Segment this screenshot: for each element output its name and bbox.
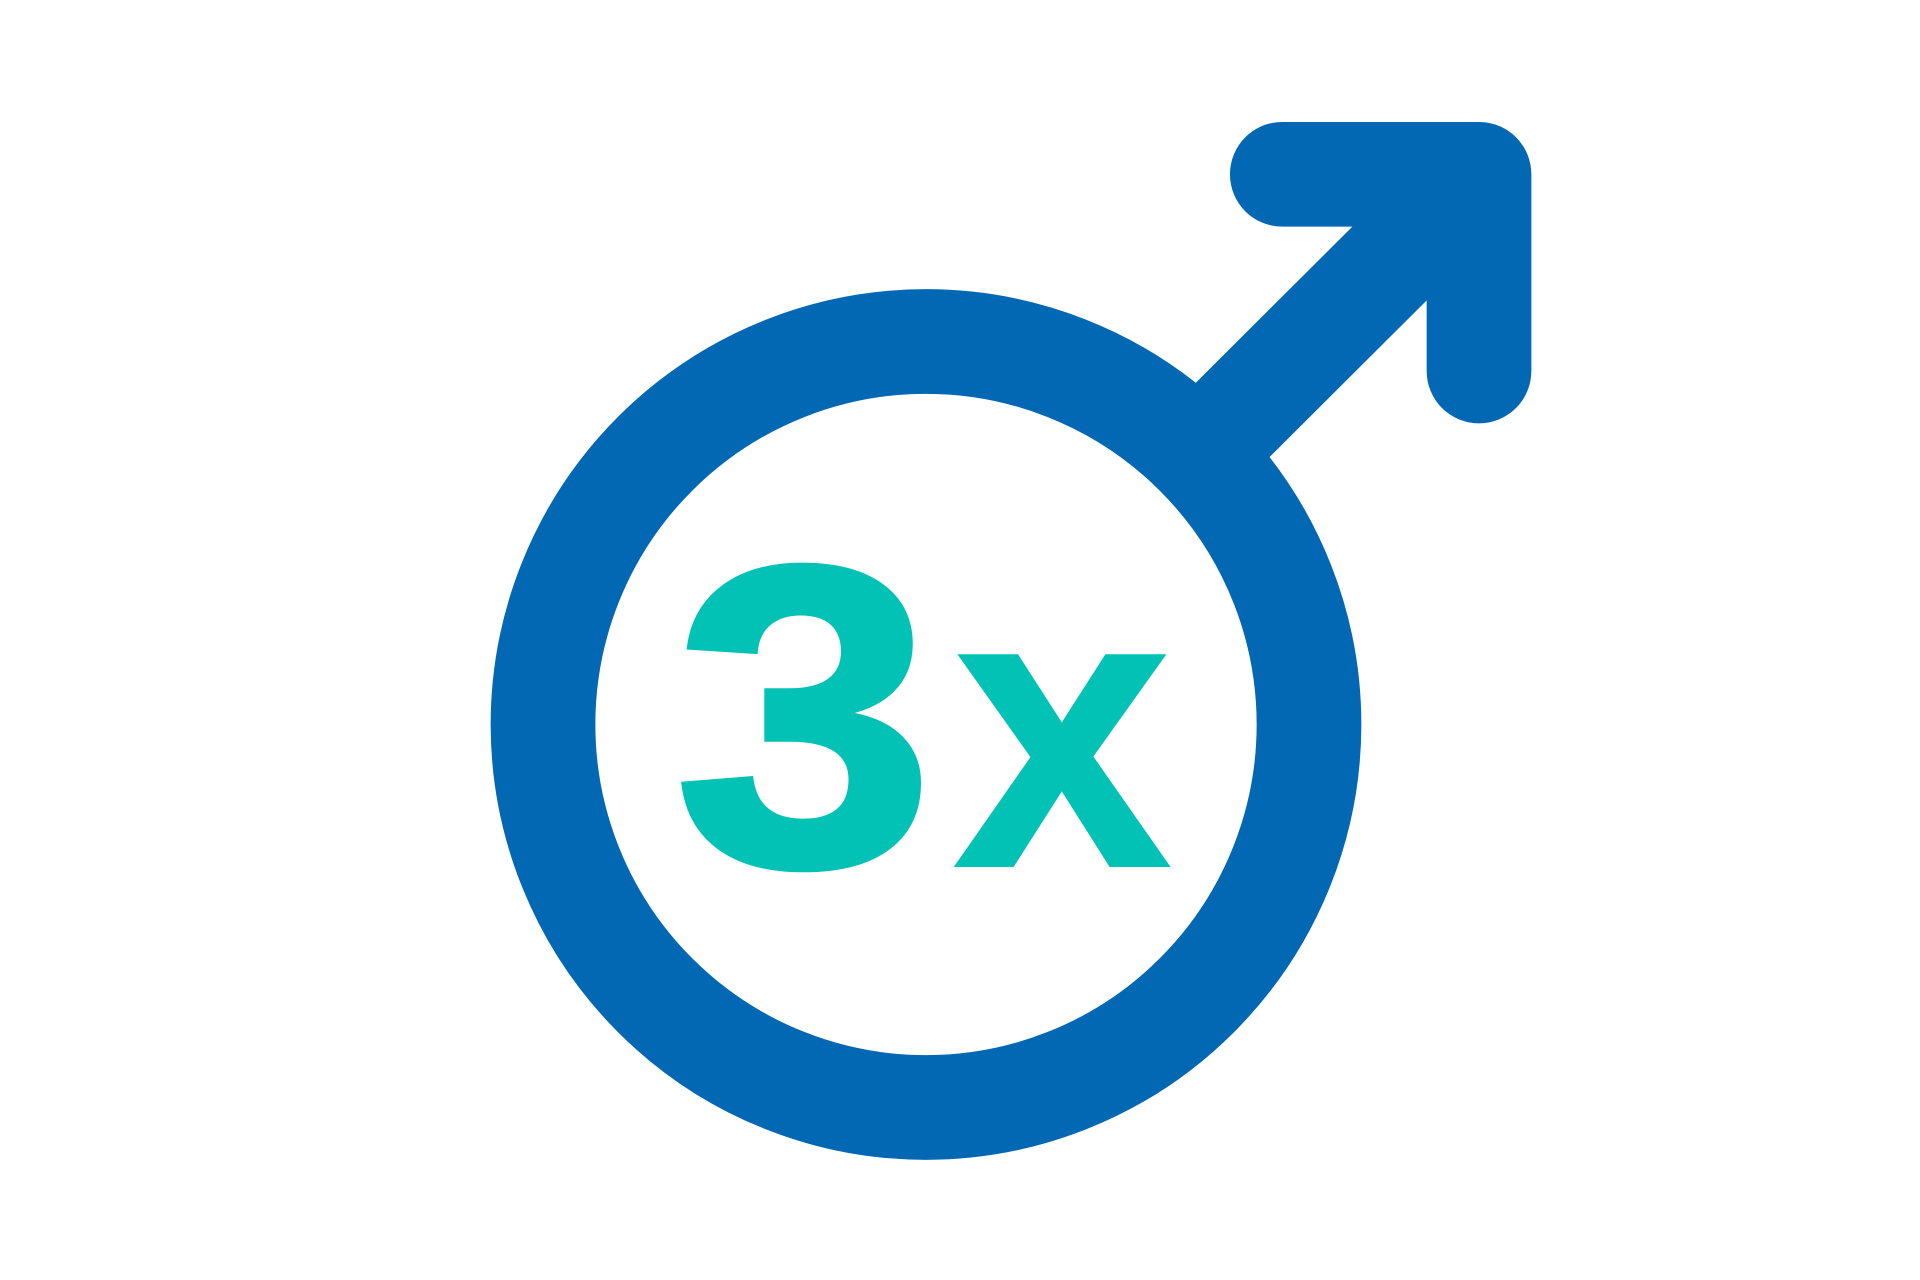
male symbol arrow <box>1198 174 1479 455</box>
letter x: x <box>953 505 1174 951</box>
male symbol ring <box>543 342 1309 1108</box>
multiplier label: 3x <box>674 478 1174 956</box>
numeral 3: 3 <box>674 478 935 956</box>
icon: male symbol <box>543 174 1479 1108</box>
